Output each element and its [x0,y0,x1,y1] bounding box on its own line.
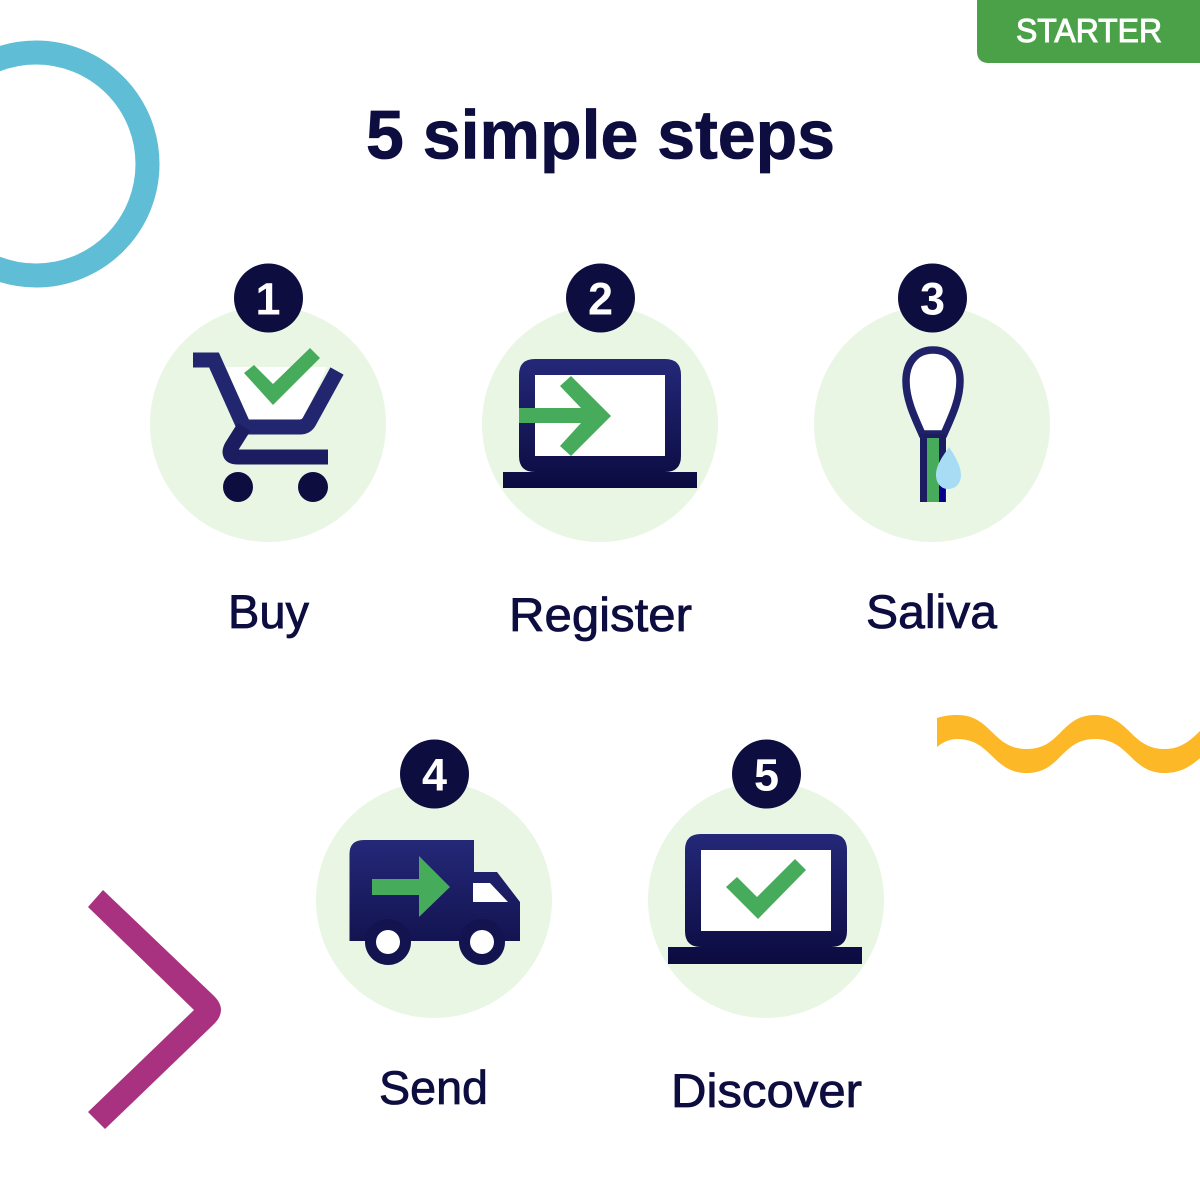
step 2: register [482,264,718,641]
step 3 number badge [898,264,967,332]
step 1 background circle [150,306,386,542]
title: 5 simple steps [366,96,835,174]
label: buy: Buy [228,585,309,638]
step 4: send [316,740,552,1114]
step 5: discover [648,740,884,1117]
step 3 number badge: 3 [920,274,945,324]
step 4 number badge: 4 [422,750,447,800]
decorative magenta chevron [88,890,221,1129]
label: saliva: Saliva [866,585,998,638]
step 5 number badge [732,740,801,808]
decorative blue ring [0,52,148,276]
step 3: saliva [814,264,1050,638]
step 2 number badge [566,264,635,332]
icon: delivery truck with arrow [350,840,520,965]
step 4 number badge [400,740,469,808]
step 4 background circle [316,782,552,1018]
icon: shopping cart with check [193,348,337,502]
step 1: buy [150,264,386,638]
step 1 number badge [234,264,303,332]
badge: starter [977,0,1200,63]
badge: starter: STARTER [1016,12,1162,49]
step 2 number badge: 2 [588,274,613,324]
step 2 background circle [482,306,718,542]
icon: laptop with arrow [503,359,697,488]
label: discover: Discover [671,1064,862,1117]
label: register: Register [509,588,692,641]
icon: laptop with check [668,834,862,964]
step 5 number badge: 5 [754,750,779,800]
icon: saliva swab [906,350,961,502]
label: send: Send [379,1061,488,1114]
step 5 background circle [648,782,884,1018]
step 1 number badge: 1 [255,274,281,324]
decorative yellow wave [937,715,1200,773]
step 3 background circle [814,306,1050,542]
